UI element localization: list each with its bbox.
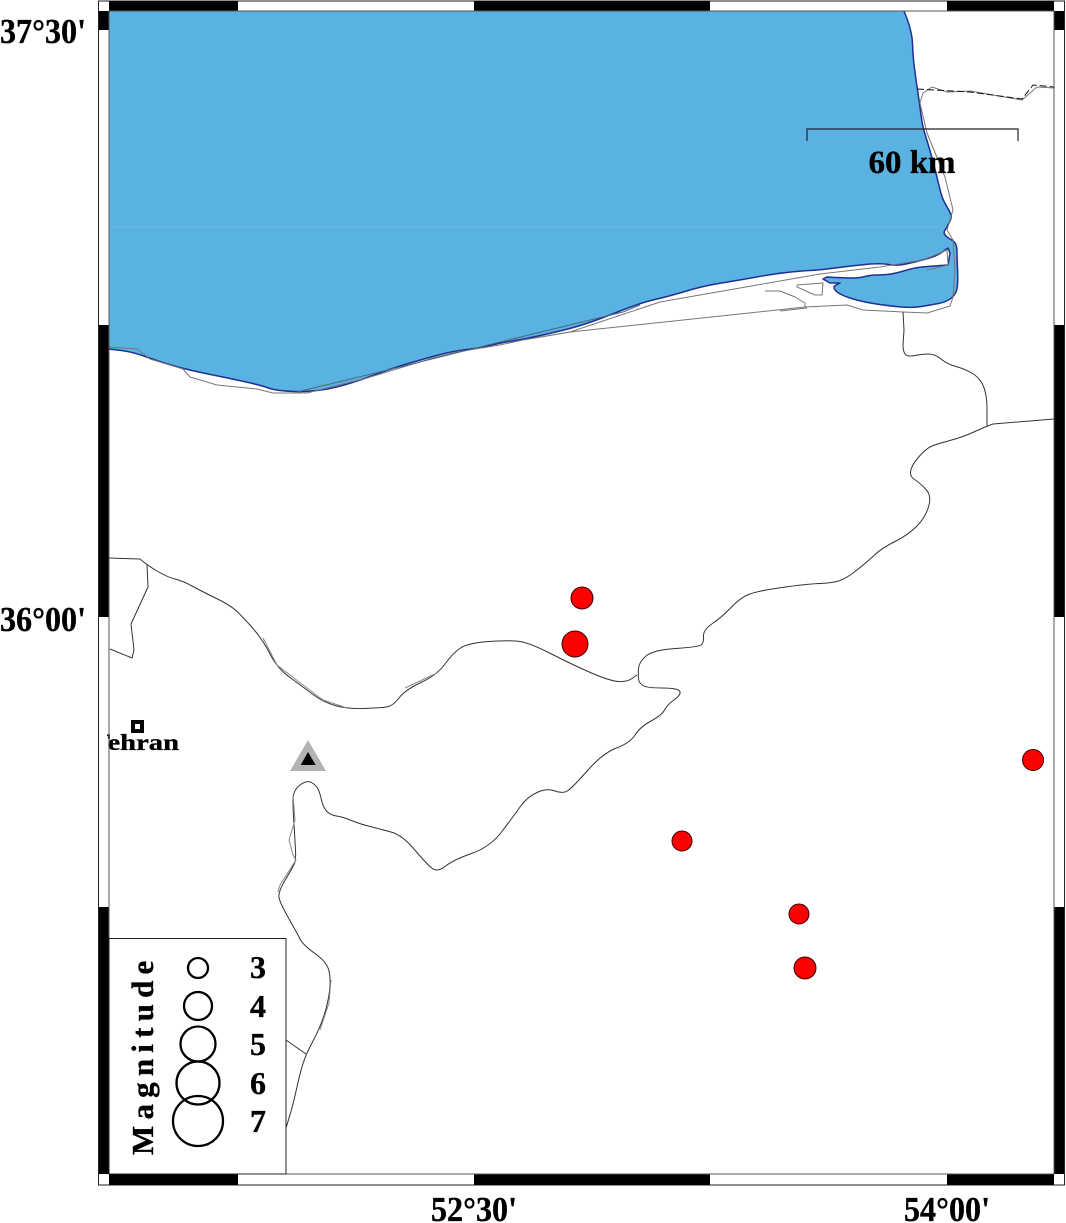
legend values: 6 [250, 1065, 266, 1101]
latitude labels: 37°30' [0, 12, 86, 51]
legend title: Magnitude [125, 955, 160, 1155]
legend: magnitude [109, 938, 286, 1174]
legend circles [173, 958, 223, 1146]
province boundaries [109, 312, 1054, 1128]
scale bar: 60 km [807, 129, 1018, 181]
latitude labels: 36°00' [0, 600, 86, 639]
city marker and label: Tehran: Tehran [91, 730, 179, 755]
legend values: 5 [250, 1026, 266, 1062]
legend values [250, 949, 266, 1139]
legend values: 4 [250, 988, 266, 1024]
latitude labels [0, 12, 86, 639]
longitude labels [431, 1190, 990, 1223]
earthquake epicentres [562, 587, 1044, 979]
legend values: 7 [250, 1103, 266, 1139]
international border (dashed) [917, 85, 1054, 99]
sea: Caspian Sea [109, 11, 958, 392]
scale bar: 60 km: 60 km [868, 145, 956, 181]
coastline and marsh outlines [109, 87, 1054, 393]
city marker and label: Tehran [107, 720, 179, 750]
legend values: 3 [250, 949, 266, 985]
station triangle [290, 740, 326, 771]
